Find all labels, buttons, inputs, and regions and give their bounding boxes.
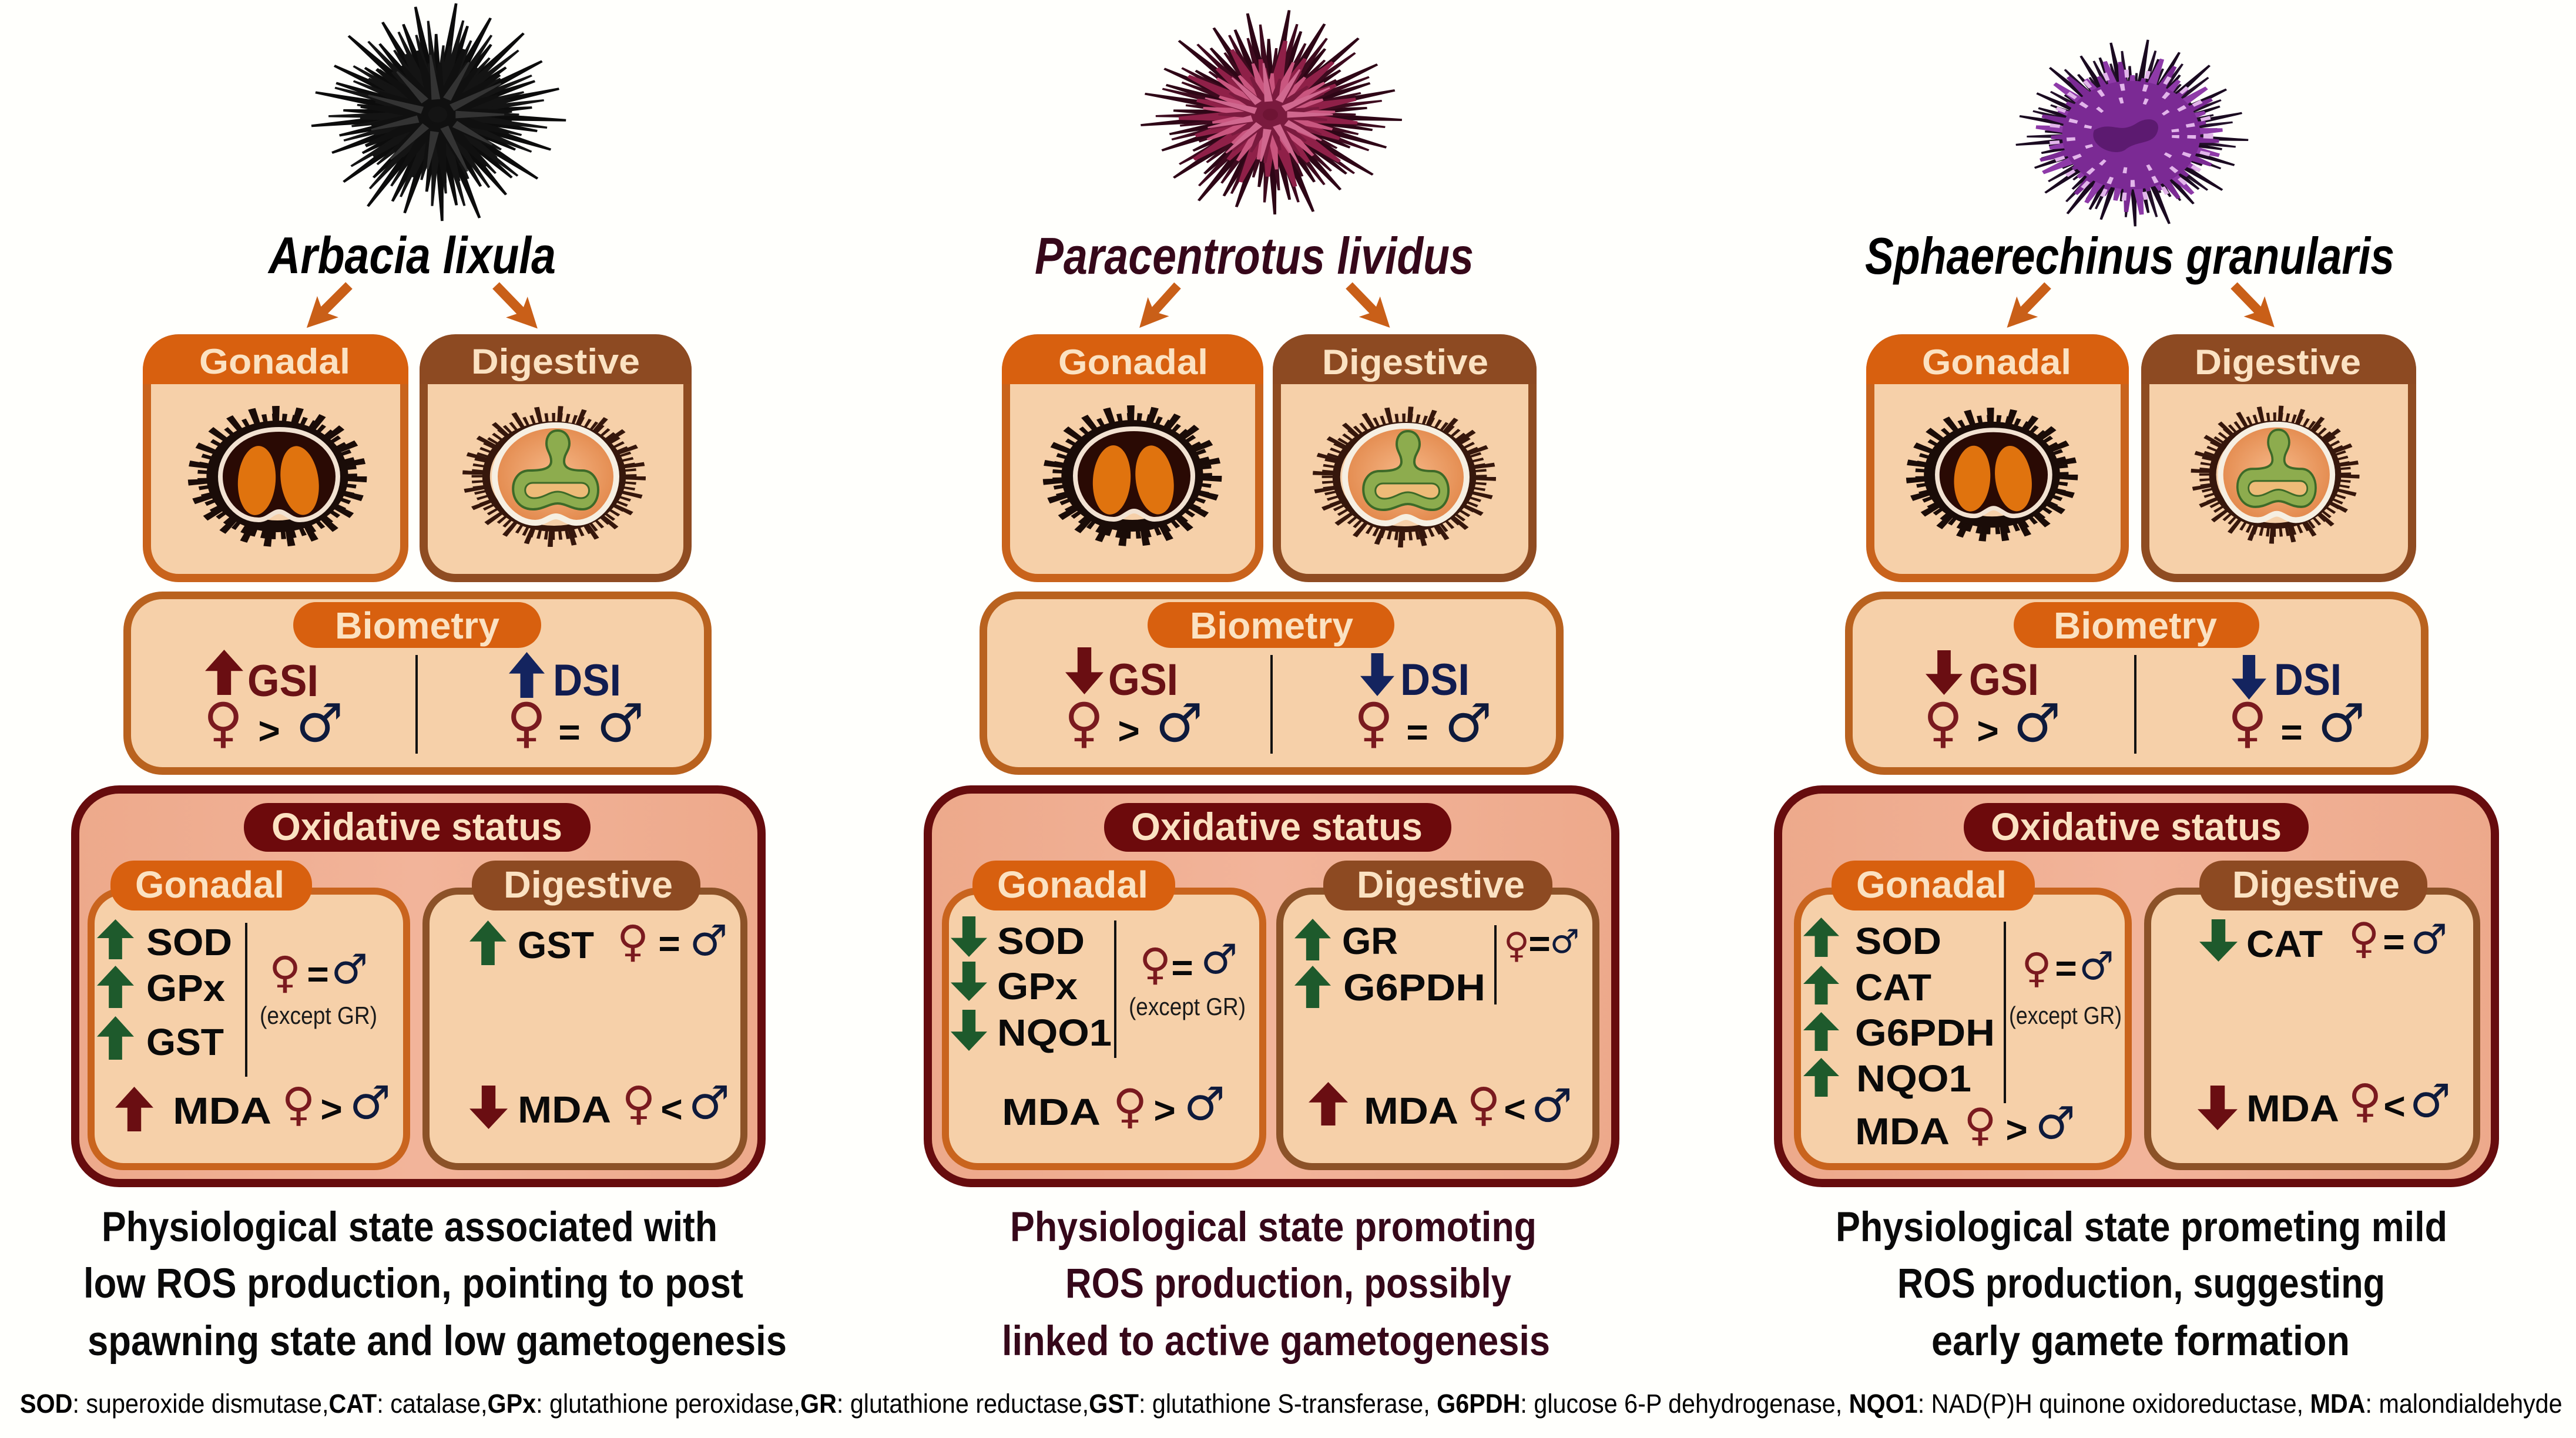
sub-panel: gonadal oxidative markers: MDA xyxy=(1855,1110,1950,1153)
sub-panel: digestive oxidative markers: GR xyxy=(1342,920,1398,962)
sub-panel: gonadal oxidative markers: = xyxy=(2055,947,2077,989)
arrow: to digestive panel xyxy=(485,275,548,339)
sub-panel: gonadal oxidative markers: ♂ xyxy=(1184,1078,1225,1131)
abbreviations footer: SOD: superoxide dismutase,CAT: catalase,GPx: glutathione peroxidase,GR: glutathione reductase,GST: glutathione S-transferase, G6PDH: glucose 6-P dehydrogenase, NQO1: NAD(P)H quinone oxidoreductase, MDA: malondialdehyde xyxy=(20,1389,2562,1419)
sub-panel: gonadal oxidative markers: ♂ xyxy=(331,945,368,993)
sub-panel: digestive oxidative markers: = xyxy=(658,922,680,965)
sub-panel: gonadal oxidative markers: ♂ xyxy=(1201,935,1237,983)
panel: digestive tissue xyxy=(420,335,692,578)
sub-panel: gonadal oxidative markers: NQO1 xyxy=(1856,1057,1971,1100)
icon: digestive cross-section xyxy=(1323,415,1485,539)
icon: digestive cross-section xyxy=(473,414,635,539)
sub-panel: gonadal oxidative markers: (except GR) xyxy=(260,1002,377,1029)
sub-panel: digestive oxidative markers: ♀ xyxy=(622,1077,656,1130)
sub-panel: digestive oxidative markers: MDA xyxy=(518,1088,611,1131)
panel: biometry: ♀ xyxy=(507,691,546,754)
panel: oxidative status: Oxidative status xyxy=(1131,805,1423,848)
panel: biometry: DSI xyxy=(2274,655,2342,705)
conclusion text xyxy=(83,1204,787,1365)
sub-panel: digestive oxidative markers xyxy=(426,861,744,1167)
panel: biometry: GSI xyxy=(1969,655,2039,705)
sub-panel: gonadal oxidative markers: GPx xyxy=(997,965,1078,1007)
sub-panel: gonadal oxidative markers: Gonadal xyxy=(997,864,1148,906)
sub-panel: gonadal oxidative markers: SOD xyxy=(1855,920,1941,962)
sub-panel: gonadal oxidative markers: ♂ xyxy=(2035,1097,2075,1149)
panel: biometry: ♀ xyxy=(1923,691,1963,754)
sub-panel: gonadal oxidative markers xyxy=(91,861,407,1167)
arrow: GSI down xyxy=(1926,650,1963,695)
panel: gonadal tissue xyxy=(1866,335,2129,578)
sub-panel: digestive oxidative markers xyxy=(1280,861,1596,1167)
sub-panel: digestive oxidative markers: < xyxy=(1504,1088,1526,1130)
sub-panel: gonadal oxidative markers: = xyxy=(307,953,329,995)
panel: biometry: ♀ xyxy=(1064,691,1104,754)
sub-panel: gonadal oxidative markers: ♀ xyxy=(1964,1098,1997,1151)
sub-panel: gonadal oxidative markers: MDA xyxy=(1002,1091,1101,1133)
sub-panel: digestive oxidative markers: GST xyxy=(518,924,594,966)
panel: biometry: Biometry xyxy=(1190,604,1353,647)
arrow: to gonadal panel xyxy=(296,275,360,338)
icon: gonad cross-section xyxy=(1916,415,2068,534)
conclusion text xyxy=(1836,1204,2447,1365)
sub-panel: gonadal oxidative markers: SOD xyxy=(146,921,232,963)
sub-panel: digestive oxidative markers: G6PDH xyxy=(1343,966,1485,1009)
sub-panel: digestive oxidative markers: < xyxy=(660,1088,683,1130)
sub-panel: digestive oxidative markers: ♀ xyxy=(2349,913,2379,963)
sub-panel: gonadal oxidative markers: ♀ xyxy=(1113,1079,1147,1134)
panel: biometry: ♀ xyxy=(1354,691,1394,754)
panel: gonadal tissue: Gonadal xyxy=(1922,342,2071,382)
sub-panel: gonadal oxidative markers: ♂ xyxy=(2079,943,2114,989)
sub-panel: digestive oxidative markers: < xyxy=(2383,1085,2406,1127)
icon: digestive cross-section xyxy=(2201,414,2350,536)
panel: digestive tissue xyxy=(1273,335,1537,578)
panel: biometry: > xyxy=(258,710,280,752)
sub-panel: gonadal oxidative markers: ♂ xyxy=(350,1077,391,1130)
panel: digestive tissue: Digestive xyxy=(2195,342,2361,382)
urchin illustration: Sphaerechinus granularis xyxy=(2014,39,2249,230)
panel: oxidative status xyxy=(75,789,762,1183)
conclusion text: ROS production, possibly xyxy=(1065,1261,1511,1307)
panel: biometry: Biometry xyxy=(2054,604,2217,647)
species title: Paracentrotus lividus xyxy=(1035,227,1474,285)
panel: oxidative status xyxy=(928,789,1615,1183)
sub-panel: digestive oxidative markers: Digestive xyxy=(2232,864,2400,906)
conclusion text: linked to active gametogenesis xyxy=(1002,1318,1550,1365)
sub-panel: gonadal oxidative markers xyxy=(1797,861,2128,1167)
sub-panel: digestive oxidative markers: ♀ xyxy=(1504,925,1530,966)
sub-panel: digestive oxidative markers: ♂ xyxy=(2411,915,2447,963)
arrow: DSI down xyxy=(2232,655,2266,700)
sub-panel: digestive oxidative markers: ♂ xyxy=(689,1077,730,1130)
panel: biometry: DSI xyxy=(1400,655,1470,705)
sub-panel: gonadal oxidative markers: ♀ xyxy=(269,948,301,998)
panel: biometry: = xyxy=(2280,711,2303,753)
arrow: GSI down xyxy=(1065,647,1103,694)
species title: Sphaerechinus granularis xyxy=(1865,227,2394,285)
sub-panel: digestive oxidative markers: = xyxy=(2383,920,2405,963)
panel: biometry xyxy=(1849,596,2424,771)
conclusion text: spawning state and low gametogenesis xyxy=(88,1318,787,1365)
sub-panel: gonadal oxidative markers: (except GR) xyxy=(1129,993,1246,1020)
conclusion text: Physiological state associated with xyxy=(102,1204,717,1251)
sub-panel: gonadal oxidative markers: = xyxy=(1171,946,1193,989)
panel: oxidative status: Oxidative status xyxy=(1991,805,2282,848)
panel: biometry: ♂ xyxy=(1156,693,1203,754)
panel: biometry: DSI xyxy=(553,656,621,705)
conclusion text xyxy=(1002,1204,1550,1365)
icon: gonad cross-section xyxy=(1053,414,1212,538)
sub-panel: digestive oxidative markers: ♀ xyxy=(1467,1078,1501,1131)
sub-panel: gonadal oxidative markers: GPx xyxy=(146,967,225,1009)
sub-panel: digestive oxidative markers: ♂ xyxy=(690,916,727,965)
panel: gonadal tissue xyxy=(1002,335,1263,578)
sub-panel: digestive oxidative markers: ♂ xyxy=(1550,923,1579,961)
panel: biometry: ♀ xyxy=(2228,691,2268,754)
sub-panel: gonadal oxidative markers: ♀ xyxy=(2021,944,2052,992)
panel: biometry: = xyxy=(558,711,581,753)
sub-panel: gonadal oxidative markers: (except GR) xyxy=(2009,1002,2122,1029)
panel: biometry: ♂ xyxy=(296,693,343,754)
panel: gonadal tissue: Gonadal xyxy=(199,342,350,381)
sub-panel: gonadal oxidative markers: GST xyxy=(146,1021,224,1063)
arrow: to gonadal panel xyxy=(1129,276,1188,337)
sub-panel: digestive oxidative markers: CAT xyxy=(2246,923,2323,965)
panel: biometry: > xyxy=(1977,710,1999,752)
conclusion text: Physiological state prometing mild xyxy=(1836,1204,2447,1251)
panel: biometry: GSI xyxy=(247,656,318,706)
sub-panel: gonadal oxidative markers: > xyxy=(320,1088,343,1130)
panel: digestive tissue: Digestive xyxy=(1322,342,1488,382)
icon: gonad cross-section xyxy=(198,414,357,539)
conclusion text: Physiological state promoting xyxy=(1010,1204,1537,1251)
arrow: to digestive panel xyxy=(2223,275,2285,337)
sub-panel: digestive oxidative markers: MDA xyxy=(1364,1090,1458,1132)
panel: biometry: ♂ xyxy=(1445,693,1492,754)
panel: biometry: GSI xyxy=(1108,655,1178,705)
panel: biometry: ♀ xyxy=(203,691,243,754)
conclusion text: low ROS production, pointing to post xyxy=(83,1261,743,1307)
sub-panel: digestive oxidative markers: Digestive xyxy=(1357,864,1525,906)
arrow: to gonadal panel xyxy=(1997,275,2058,338)
sub-panel: digestive oxidative markers: ♀ xyxy=(2348,1075,2382,1128)
arrow: GSI up xyxy=(205,650,243,695)
sub-panel: gonadal oxidative markers: ♀ xyxy=(281,1078,316,1131)
column: Sphaerechinus granularis xyxy=(1778,39,2495,1365)
panel: gonadal tissue xyxy=(143,335,408,578)
conclusion text: ROS production, suggesting xyxy=(1897,1261,2385,1307)
panel: digestive tissue xyxy=(2141,335,2416,578)
sub-panel: gonadal oxidative markers: Gonadal xyxy=(1856,864,2007,906)
panel: biometry: > xyxy=(1118,710,1140,752)
panel: digestive tissue: Digestive xyxy=(471,342,640,381)
sub-panel: digestive oxidative markers: MDA xyxy=(2246,1087,2339,1130)
urchin illustration: Arbacia lixula xyxy=(311,3,566,221)
panel: oxidative status: Oxidative status xyxy=(271,805,562,848)
sub-panel: gonadal oxidative markers: Gonadal xyxy=(135,864,284,906)
column: Arbacia lixula xyxy=(75,3,787,1365)
sub-panel: gonadal oxidative markers: MDA xyxy=(173,1090,271,1132)
sub-panel: gonadal oxidative markers: CAT xyxy=(1855,966,1931,1009)
panel: biometry xyxy=(127,596,707,771)
sub-panel: gonadal oxidative markers: > xyxy=(2005,1108,2028,1151)
panel: biometry xyxy=(984,596,1559,771)
sub-panel: gonadal oxidative markers xyxy=(945,861,1263,1167)
panel: biometry: ♂ xyxy=(597,693,644,754)
arrow: DSI down xyxy=(1360,653,1394,696)
arrow: DSI up xyxy=(509,652,545,698)
sub-panel: digestive oxidative markers: ♀ xyxy=(617,916,649,967)
sub-panel: gonadal oxidative markers: SOD xyxy=(997,920,1085,962)
panel: biometry: Biometry xyxy=(335,604,499,647)
sub-panel: digestive oxidative markers: Digestive xyxy=(504,864,673,906)
sub-panel: digestive oxidative markers: ♂ xyxy=(2410,1075,2451,1128)
sub-panel: digestive oxidative markers: ♂ xyxy=(1531,1080,1572,1133)
panel: biometry: ♂ xyxy=(2318,693,2365,754)
conclusion text: early gamete formation xyxy=(1931,1318,2350,1365)
sub-panel: gonadal oxidative markers: G6PDH xyxy=(1855,1012,1995,1054)
panel: gonadal tissue: Gonadal xyxy=(1058,342,1208,382)
arrow: to digestive panel xyxy=(1339,275,1400,338)
urchin illustration: Paracentrotus lividus xyxy=(1140,9,1402,214)
sub-panel: gonadal oxidative markers: > xyxy=(1153,1089,1176,1131)
sub-panel: gonadal oxidative markers: NQO1 xyxy=(997,1012,1112,1054)
sub-panel: digestive oxidative markers: = xyxy=(1528,922,1551,965)
panel: oxidative status xyxy=(1778,789,2495,1183)
species title: Arbacia lixula xyxy=(267,226,556,284)
sub-panel: gonadal oxidative markers: ♀ xyxy=(1139,939,1171,990)
column: Paracentrotus lividus xyxy=(928,9,1615,1365)
panel: biometry: ♂ xyxy=(2014,693,2061,754)
panel: biometry: = xyxy=(1406,711,1428,753)
sub-panel: digestive oxidative markers xyxy=(2148,861,2477,1167)
